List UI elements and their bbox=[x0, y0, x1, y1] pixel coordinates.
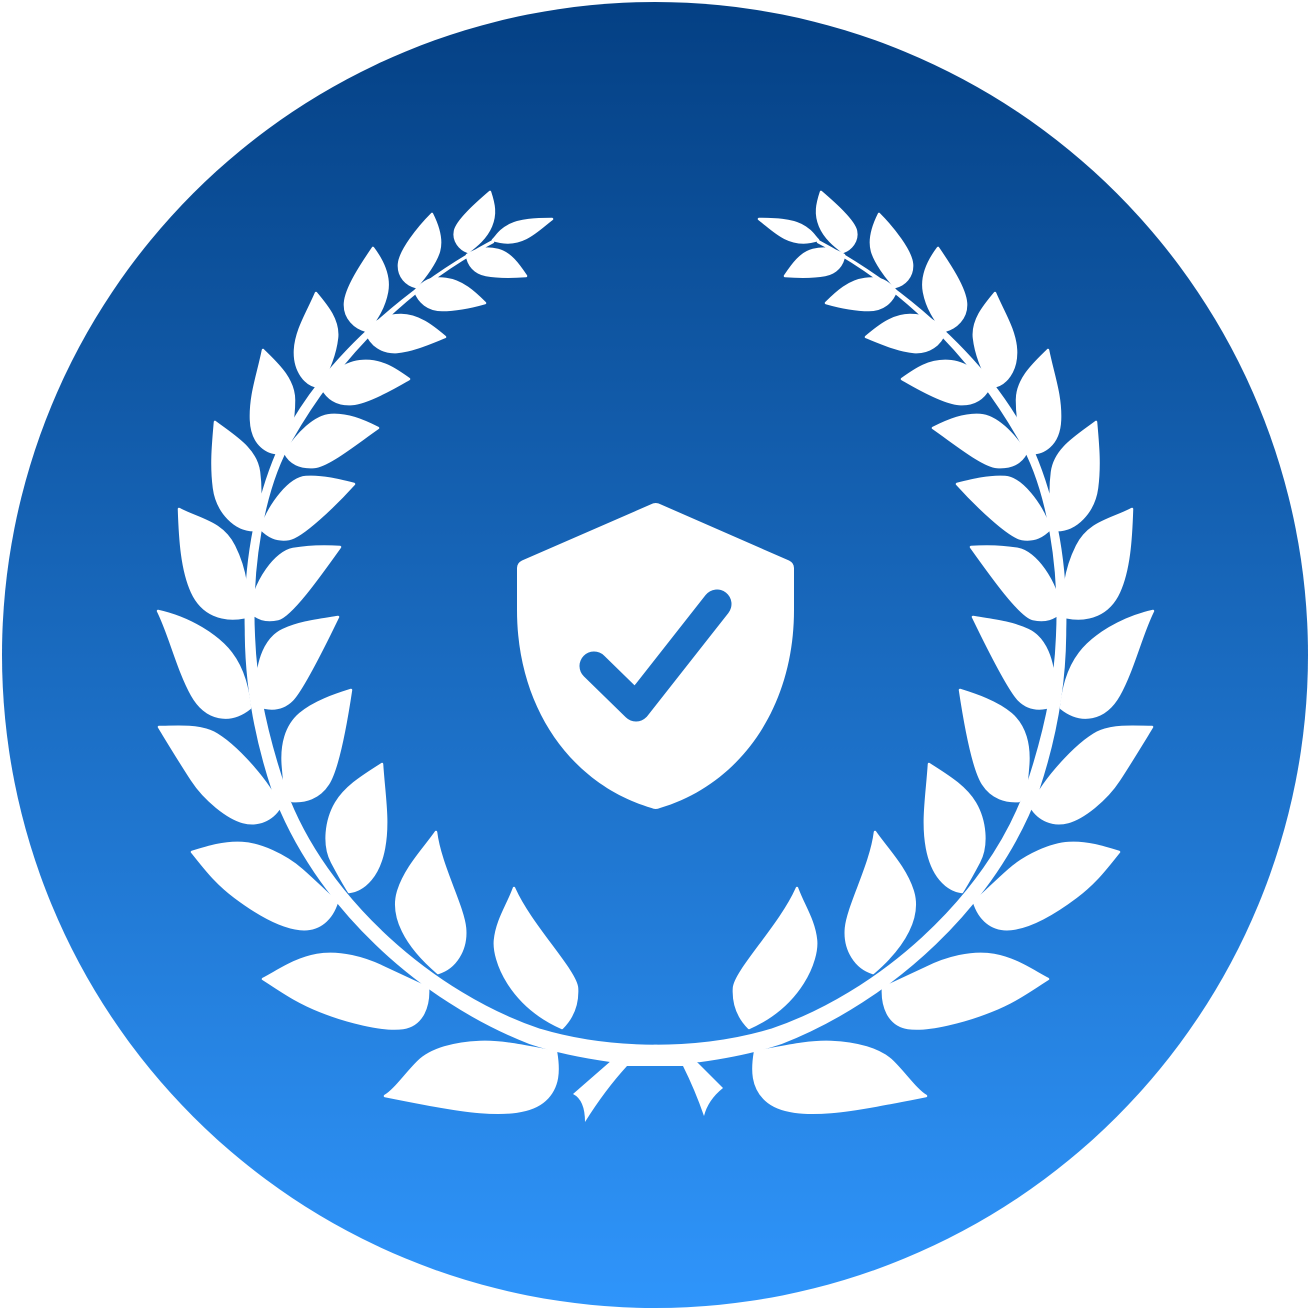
leaf 20 bbox=[192, 843, 337, 929]
leaf 4 bbox=[399, 214, 440, 287]
icon: shield with check mark bbox=[517, 503, 794, 809]
check mark bbox=[594, 604, 717, 707]
leaf 22 bbox=[263, 954, 428, 1029]
leaf 17 bbox=[257, 617, 338, 708]
laurel branch: right (mirrored) bbox=[654, 192, 1153, 1113]
leaf 25 bbox=[385, 1042, 558, 1113]
leaf 21 bbox=[327, 764, 386, 892]
leaf 23 bbox=[396, 832, 465, 973]
leaf 9 bbox=[322, 361, 409, 404]
leaf 13 bbox=[261, 477, 354, 539]
leaf 24 bbox=[495, 888, 577, 1028]
wreath stem bbox=[246, 241, 657, 1061]
leaf 2 bbox=[493, 219, 552, 242]
leaf 5 bbox=[415, 278, 485, 310]
leaf 18 bbox=[159, 727, 280, 823]
leaf 11 bbox=[285, 415, 378, 467]
leaf 14 bbox=[179, 509, 247, 618]
leaf 16 bbox=[158, 611, 250, 718]
leaf 12 bbox=[212, 422, 260, 530]
leaf 10 bbox=[251, 350, 294, 453]
leaf 7 bbox=[366, 315, 445, 352]
laurel branch: left bbox=[158, 192, 657, 1113]
leaf 19 bbox=[283, 690, 351, 801]
leaf 6 bbox=[345, 248, 388, 331]
leaf 1 bbox=[455, 192, 494, 252]
ribbon tails at wreath base bbox=[573, 1050, 723, 1122]
leaf 3 bbox=[467, 249, 526, 277]
shield body bbox=[517, 503, 794, 809]
leaf 8 bbox=[295, 293, 337, 387]
leaf 15 bbox=[250, 546, 340, 620]
